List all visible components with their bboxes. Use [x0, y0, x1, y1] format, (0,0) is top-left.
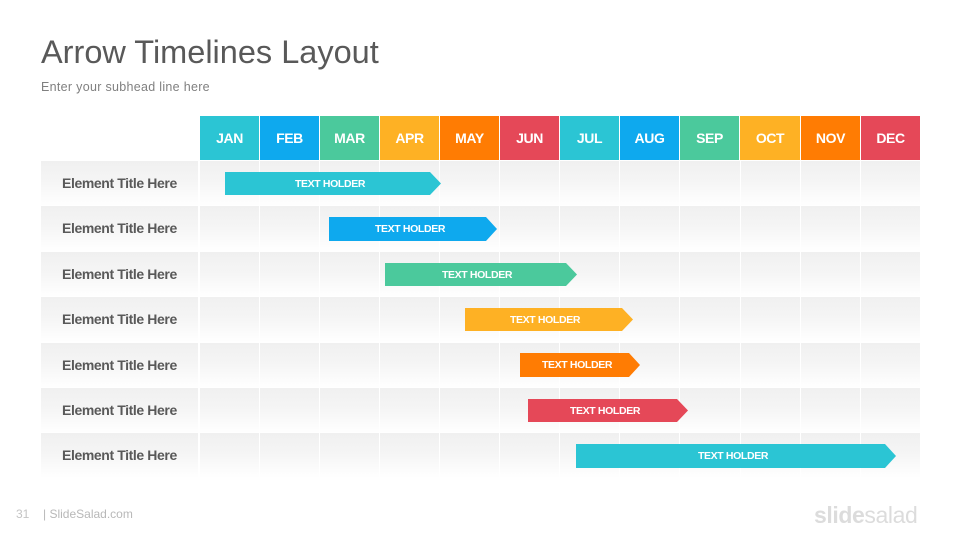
- month: FEB: [260, 116, 319, 160]
- arrow bar 5: [520, 353, 640, 377]
- row 1: [41, 161, 920, 191]
- title: Arrow Timelines Layout: [41, 34, 379, 70]
- arrow bar 7: [576, 444, 896, 468]
- month: NOV: NOV: [816, 130, 845, 146]
- month: JUN: [500, 116, 559, 160]
- arrow bar 1: TEXT HOLDER: [295, 178, 365, 190]
- arrow bar 5: TEXT HOLDER: [542, 359, 612, 371]
- month: JAN: [200, 116, 259, 160]
- month: AUG: [620, 116, 679, 160]
- month: OCT: [740, 116, 800, 160]
- month: JUL: JUL: [577, 130, 602, 146]
- logo: slidesalad: [814, 502, 917, 528]
- month: DEC: DEC: [876, 130, 905, 146]
- month: DEC: [861, 116, 920, 160]
- row 6: Element Title Here: [62, 402, 177, 418]
- month: SEP: SEP: [696, 130, 723, 146]
- row 7: Element Title Here: [62, 447, 177, 463]
- month: NOV: [801, 116, 860, 160]
- month: SEP: [680, 116, 739, 160]
- arrow bar 2: [329, 217, 497, 241]
- arrow bar 3: TEXT HOLDER: [442, 269, 512, 281]
- month: MAR: MAR: [334, 130, 365, 146]
- month: APR: [380, 116, 439, 160]
- month: MAY: [440, 116, 499, 160]
- arrow bar 4: [465, 308, 633, 331]
- arrow bar 7: TEXT HOLDER: [698, 450, 768, 462]
- arrow bar 2: TEXT HOLDER: [375, 223, 445, 235]
- row 3: [41, 252, 920, 282]
- month: APR: APR: [395, 130, 424, 146]
- row 5: [41, 343, 920, 373]
- row 5: Element Title Here: [62, 357, 177, 373]
- page number: 31: [16, 507, 29, 521]
- row 2: Element Title Here: [62, 220, 177, 236]
- row 7: [41, 433, 920, 463]
- row 4: [41, 297, 920, 327]
- month: FEB: FEB: [276, 130, 303, 146]
- row 2: [41, 206, 920, 236]
- month: OCT: OCT: [756, 130, 784, 146]
- month: JUN: JUN: [516, 130, 543, 146]
- arrow bar 1: [225, 172, 441, 195]
- month: AUG: AUG: [635, 130, 664, 146]
- month: JAN: JAN: [216, 130, 243, 146]
- subhead: Enter your subhead line here: [41, 80, 210, 94]
- month: MAR: [320, 116, 379, 160]
- row 3: Element Title Here: [62, 266, 177, 282]
- arrow bar 6: [528, 399, 688, 422]
- arrow bar 3: [385, 263, 577, 286]
- arrow bar 6: TEXT HOLDER: [570, 405, 640, 417]
- arrow bar 4: TEXT HOLDER: [510, 314, 580, 326]
- row 1: Element Title Here: [62, 175, 177, 191]
- month header: [200, 116, 920, 160]
- month: JUL: [560, 116, 619, 160]
- row 6: [41, 388, 920, 418]
- month: MAY: MAY: [455, 130, 484, 146]
- row 4: Element Title Here: [62, 311, 177, 327]
- footer text: | SlideSalad.com: [43, 507, 133, 521]
